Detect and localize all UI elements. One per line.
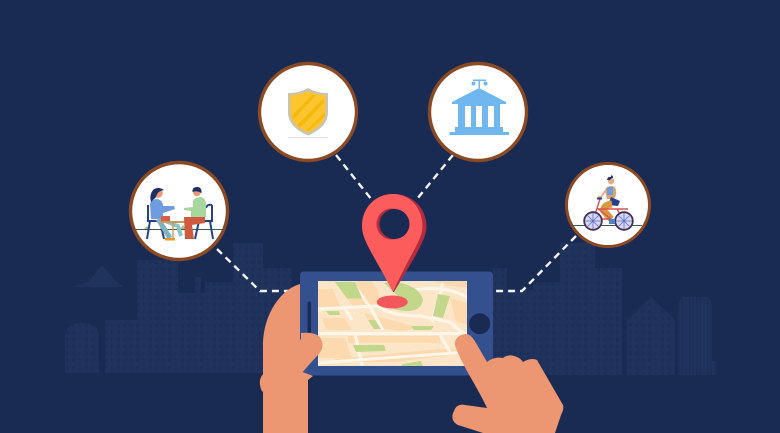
- circle ring: [260, 64, 356, 160]
- circle ring: [430, 64, 526, 160]
- phone speaker: [308, 302, 311, 334]
- small domed house: [65, 323, 99, 373]
- thumb: [290, 345, 311, 369]
- icon: shield: [288, 88, 328, 138]
- panel: cafe circle: [130, 162, 228, 260]
- panel: cyclist circle: [566, 164, 650, 246]
- gabled house: [627, 297, 675, 375]
- map green areas: [326, 281, 450, 366]
- icon: woman on bicycle: [573, 175, 642, 230]
- dashed connector: cyclist to phone: [493, 236, 576, 291]
- map roads: [318, 282, 467, 366]
- dashed connector: shield to pin: [336, 155, 372, 200]
- circle ring: [130, 162, 228, 260]
- icon: bank building: [450, 80, 509, 135]
- pin hole: [376, 208, 408, 240]
- panel: bank circle: [430, 64, 526, 160]
- infographic scene: [65, 62, 716, 433]
- city skyline right: [493, 243, 716, 375]
- circle ring: [566, 164, 650, 246]
- location pin: [362, 194, 426, 308]
- pin shade: [393, 194, 426, 292]
- striped tower: [678, 297, 716, 375]
- pin body: [362, 194, 422, 292]
- phone home button: [469, 313, 490, 334]
- map screen: [318, 281, 467, 366]
- right hand tapping screen: [452, 334, 563, 433]
- panel: shield circle: [260, 64, 356, 160]
- icon: people at cafe table: [135, 187, 223, 240]
- city skyline left: [65, 243, 292, 373]
- dashed connector: bank to pin: [417, 155, 453, 199]
- roof shape: [70, 265, 124, 287]
- dashed connector: cafe to phone: [217, 249, 300, 291]
- phone body: [300, 272, 493, 376]
- left hand holding phone: [260, 284, 322, 433]
- pin shadow ellipse: [377, 296, 408, 308]
- map blocks: [318, 281, 467, 362]
